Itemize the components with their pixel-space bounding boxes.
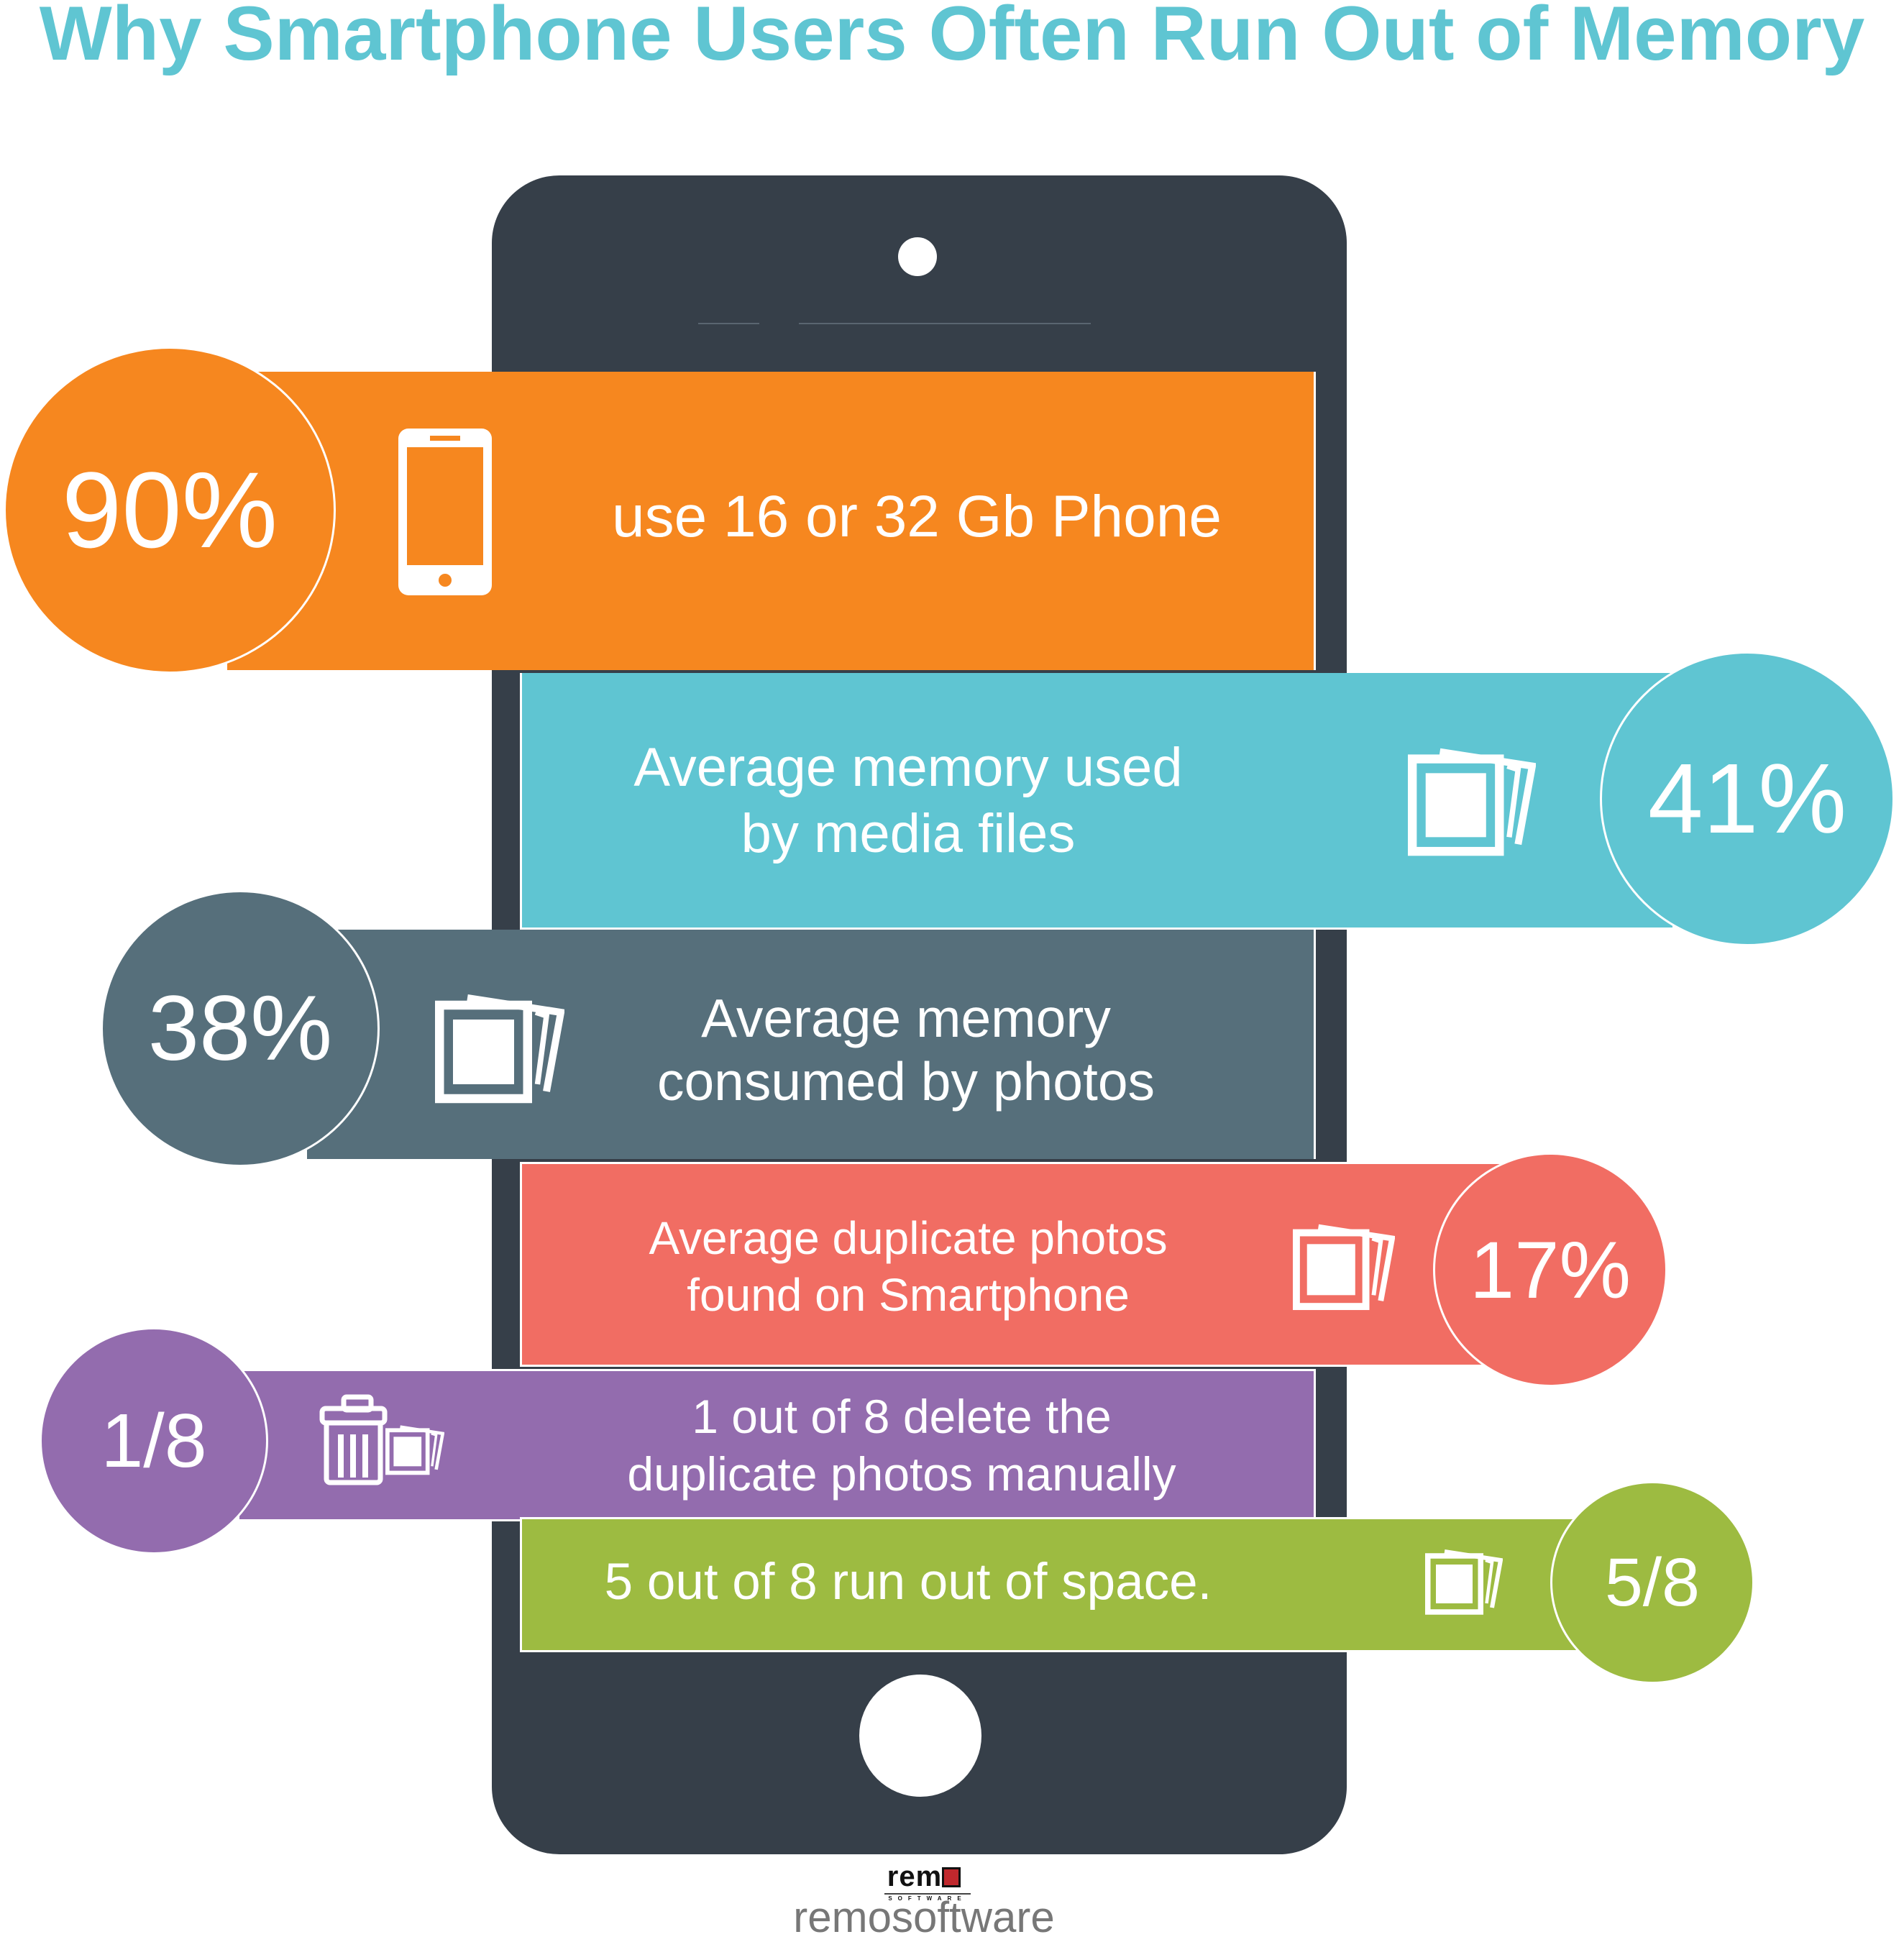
camera [898, 237, 937, 276]
circle 41%: 41% [1648, 743, 1846, 854]
text: Average memory used [633, 737, 1183, 798]
text: Average memory [701, 988, 1111, 1048]
circle 5/8: 5/8 [1605, 1544, 1700, 1621]
home button [859, 1675, 981, 1797]
text: 1 out of 8 delete the [692, 1390, 1112, 1443]
logo: SOFTWARE [888, 1895, 967, 1902]
text: use 16 or 32 Gb Phone [612, 484, 1222, 549]
panel: 41% [520, 654, 1892, 944]
panel: 90% [6, 349, 1316, 672]
text: found on Smartphone [687, 1269, 1130, 1321]
logo mark: rem [887, 1861, 942, 1892]
text: consumed by photos [657, 1051, 1155, 1112]
speaker lines [698, 323, 759, 324]
text: by media files [741, 803, 1075, 864]
text [627, 1390, 1176, 1501]
circle 5/8 [1550, 1481, 1754, 1684]
text [633, 737, 1183, 864]
text [649, 1212, 1168, 1321]
circle 17%: 17% [1470, 1225, 1631, 1314]
icon: photos [1408, 748, 1536, 856]
circle 90% [4, 347, 336, 674]
icon: photos [1425, 1549, 1503, 1615]
circle 38%: 38% [148, 977, 332, 1080]
icon: photos [1293, 1224, 1395, 1310]
circle 41% [1600, 651, 1895, 946]
panel: 17% [520, 1155, 1665, 1385]
panel: 1/8 [42, 1329, 1316, 1552]
circle 38% [101, 890, 380, 1167]
circle 1/8 [40, 1327, 268, 1554]
icon: photos [435, 994, 564, 1103]
text: Average duplicate photos [649, 1212, 1168, 1264]
icon: trash and photos [319, 1395, 444, 1485]
circle 1/8: 1/8 [101, 1398, 207, 1483]
circle 90%: 90% [62, 449, 278, 570]
panel: 38% [103, 892, 1316, 1165]
text [657, 988, 1155, 1112]
logo [793, 1861, 1055, 1941]
text: 5 out of 8 run out of space. [605, 1554, 1212, 1611]
panel: 5/8 [520, 1483, 1752, 1682]
logo text: remosoftware [793, 1893, 1055, 1941]
phone body [492, 175, 1347, 1854]
circle 17% [1433, 1153, 1667, 1387]
text: duplicate photos manually [627, 1447, 1176, 1501]
icon: phone [398, 429, 492, 595]
